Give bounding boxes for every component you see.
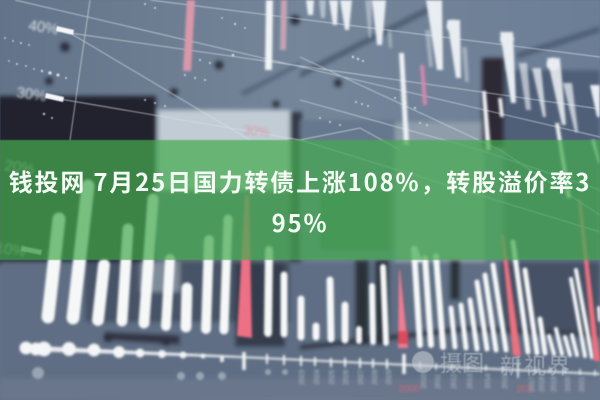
trend lines	[15, 0, 600, 232]
percent axis labels	[0, 17, 271, 260]
red year labels: 201	[516, 384, 533, 395]
year tick labels: 2013	[467, 373, 474, 389]
watermark	[412, 346, 572, 381]
headline	[9, 163, 591, 239]
year tick labels: 2029	[386, 369, 393, 385]
year tick labels: 2020	[565, 376, 572, 392]
blurred reflections	[32, 367, 288, 380]
green title band	[0, 140, 600, 260]
red highlighted bars	[237, 195, 600, 361]
percent label markers	[21, 26, 74, 255]
year tick labels: 2028	[372, 369, 379, 385]
year tick labels: 2012	[451, 373, 458, 389]
red year labels	[398, 384, 533, 395]
time axis with ticks	[20, 342, 600, 380]
headline: 钱投网 7月25日国力转债上涨108%，转股溢价率3	[9, 163, 591, 198]
headline: 95%	[272, 204, 328, 239]
year tick labels: 2015	[502, 373, 509, 389]
year tick labels: 2024	[314, 369, 321, 385]
year tick labels: 2014	[485, 373, 492, 389]
watermark: 摄图	[440, 346, 484, 378]
percent axis labels: 30%	[243, 122, 271, 140]
year tick labels: 2025	[329, 369, 336, 385]
year tick labels: 2027	[358, 369, 365, 385]
year tick labels: 2019	[551, 376, 558, 392]
watermark: 新视界	[500, 349, 572, 381]
year tick labels: 2026	[343, 369, 350, 385]
year tick labels: 2017	[529, 376, 536, 392]
year tick labels: 2018	[539, 376, 546, 392]
dotted series	[4, 3, 428, 126]
percent axis labels: 30%	[15, 84, 48, 105]
lower bar chart	[48, 186, 600, 357]
year tick labels: 2023	[299, 369, 306, 385]
year tick labels: 2010	[421, 373, 428, 389]
red year labels: 2000	[398, 384, 421, 395]
year tick labels: 2021	[579, 376, 586, 392]
year tick labels	[299, 369, 586, 392]
hanging translucent bars	[306, 0, 600, 132]
percent axis labels: 20%	[3, 157, 36, 178]
upper bars	[183, 0, 600, 262]
percent axis labels: 40%	[27, 17, 60, 38]
year tick labels: 2011	[435, 374, 442, 389]
